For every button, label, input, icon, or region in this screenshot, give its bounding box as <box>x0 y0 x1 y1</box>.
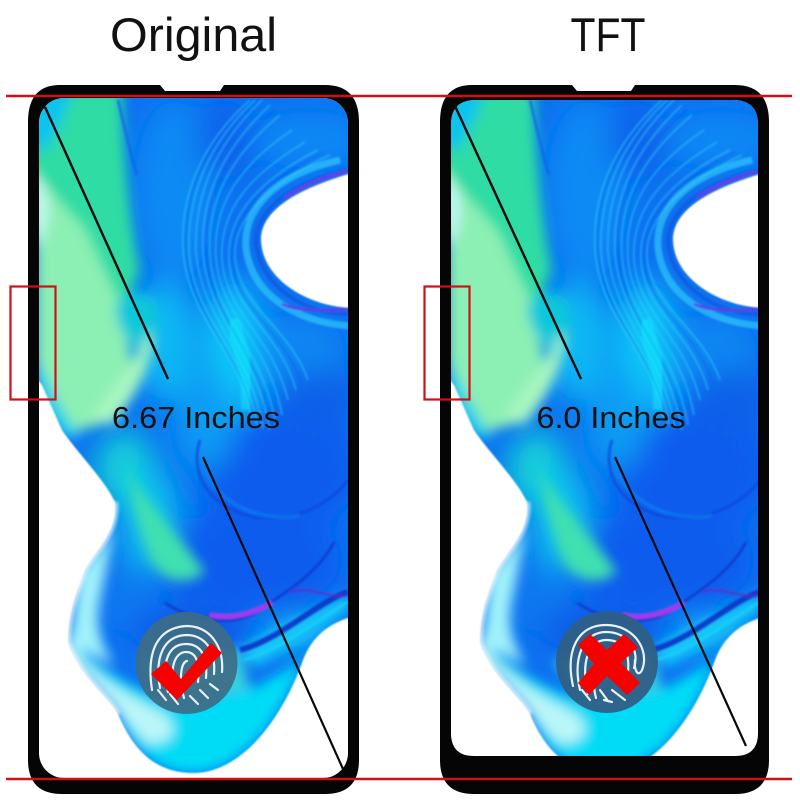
fingerprint ridges <box>571 625 644 702</box>
diagonal measure line upper: TFT <box>455 106 581 379</box>
title: TFT: TFT <box>570 8 646 61</box>
wallpaper: TFT <box>451 100 758 756</box>
fingerprint sensor with check mark <box>136 612 238 714</box>
diagonal measure line lower: original <box>203 457 343 769</box>
size label: 6.0 inches: 6.0 Inches <box>536 400 686 435</box>
diagonal measure line upper: original <box>45 107 168 379</box>
title: Original: Original <box>110 8 277 61</box>
screen: TFT <box>451 100 758 756</box>
red highlight box: original bezel <box>10 286 56 400</box>
fingerprint sensor with cross <box>556 611 658 713</box>
screen: original <box>39 98 348 778</box>
red guide line: top <box>6 95 792 97</box>
wallpaper: original <box>39 98 348 774</box>
red cross <box>578 634 640 695</box>
diagonal measure line lower: TFT <box>615 457 746 746</box>
fingerprint ridges <box>150 626 222 704</box>
phone body: TFT <box>440 85 769 794</box>
red check mark <box>151 643 222 700</box>
red guide line: bottom <box>6 778 792 780</box>
panel: original phone <box>20 80 370 794</box>
size label: 6.67 inches: 6.67 Inches <box>112 400 280 435</box>
phone body: original <box>28 85 359 794</box>
panel: TFT phone <box>432 80 782 794</box>
red highlight box: TFT bezel <box>424 286 470 400</box>
